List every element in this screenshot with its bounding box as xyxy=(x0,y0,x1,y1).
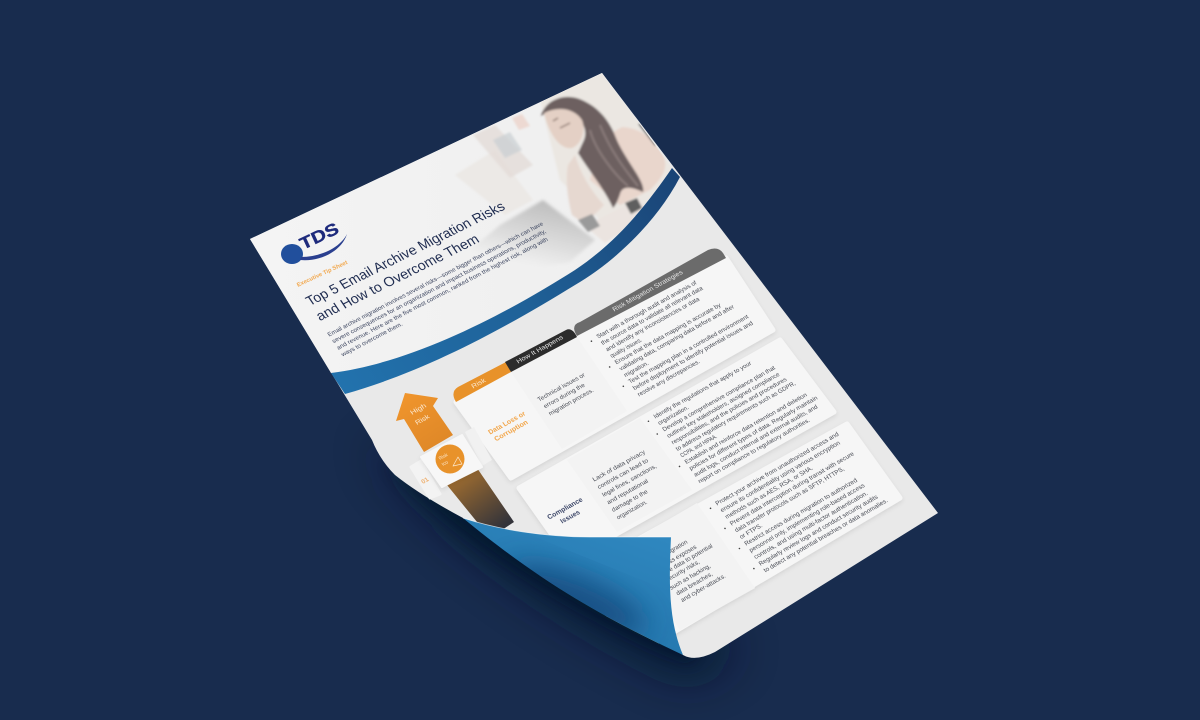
strategies: row 1: Ensure that the data mapping is accurate by xyxy=(613,302,723,366)
how it happens: row 2: organization. xyxy=(615,499,649,521)
how it happens: row 3: such as hacking, xyxy=(669,563,712,592)
header tab: Risk xyxy=(453,362,511,402)
hero backdrop xyxy=(250,73,610,373)
how it happens: row 2: damage to the xyxy=(611,488,650,514)
strategies: row 1: migration. xyxy=(623,360,650,379)
how it happens: row 2: legal fines, sanctions, xyxy=(601,463,658,499)
how it happens: row 3: data breaches, xyxy=(675,571,714,597)
strategies: row 2: to address regulatory requirements such as GDPR, xyxy=(675,380,797,453)
icon: risk badge xyxy=(436,444,464,474)
risk name: Data Loss or Corruption: Corruption xyxy=(493,419,530,443)
page shadow under the curl xyxy=(370,440,740,680)
strategies: row 1: quality issues. xyxy=(609,337,644,360)
risk name: Compliance Issues: Issues xyxy=(559,509,582,525)
strategies: row 3 xyxy=(707,430,890,578)
icon: risk badge: Ico xyxy=(441,459,450,468)
page curl: blue flap xyxy=(463,518,683,655)
how it happens: row 1: errors during the xyxy=(542,382,587,410)
how it happens: row 1: Technical issues or xyxy=(536,372,587,403)
icon: risk badge: Risk xyxy=(438,452,450,462)
strategies: row 3: controls, and using multi-factor authentication. xyxy=(753,490,870,561)
how it happens: row 2: Lack of data privacy xyxy=(591,448,648,483)
header tab: Risk: Risk xyxy=(470,377,488,390)
page sheet xyxy=(250,73,938,658)
how it happens: row 3: security risks, xyxy=(665,559,701,583)
row 1 middle column xyxy=(511,337,627,449)
strategies: row 3: Restrict access during migration to authorized xyxy=(743,477,859,547)
photo: woman at laptop xyxy=(455,73,680,243)
strategies: row 2: audit logs, conduct internal and external audits, and xyxy=(692,404,819,479)
strategies: row 3: methods such as AES, RSA, or SHA. xyxy=(724,465,815,521)
strategies: row 3: to detect any potential breaches or data anomalies. xyxy=(762,497,890,574)
strategies: row 1: resolve any discrepancies. xyxy=(636,358,702,398)
header tab: How It Happens: How It Happens xyxy=(515,334,565,365)
strategies: row 3: Prevent data interception during transit with secure xyxy=(729,450,856,527)
number tab: 01 xyxy=(411,461,440,498)
bar below the badge xyxy=(447,468,514,538)
logo swoosh xyxy=(300,234,347,260)
intro paragraph: ways to overcome them. xyxy=(339,321,404,359)
strategies: row 2: policies for different types of data. Regularly maintain xyxy=(688,395,819,472)
strategies: row 1: Test the mapping plan in a controlled environment xyxy=(627,314,750,385)
logo globe xyxy=(281,244,303,264)
row 3 base xyxy=(606,422,902,644)
flap top highlight xyxy=(463,518,671,537)
strategies: row 2: Identify the regulations that apply to your xyxy=(652,360,753,420)
number tab: 01: 01 xyxy=(420,476,431,486)
strategies: row 3: data transfer protocols such as SFTP, HTTPS, xyxy=(734,466,846,534)
curved header band xyxy=(331,168,680,394)
row 1 base xyxy=(456,258,773,478)
how it happens: row 1: migration process. xyxy=(547,387,595,417)
risk name: Data Loss or Corruption: Data Loss or xyxy=(487,411,527,436)
logo wordmark: TDS xyxy=(297,219,342,254)
strategies: row 3: or FTPS. xyxy=(738,522,764,541)
risk name: Compliance Issues: Compliance xyxy=(546,497,585,521)
how it happens: row 3: Data migration xyxy=(651,538,690,565)
laptop xyxy=(482,199,594,261)
how it happens: row 3: and cyber-attacks. xyxy=(680,573,727,604)
strategies: row 1: validating data, comparing data before and after xyxy=(618,304,736,372)
strategies: row 2: responsibilities, and the policies and procedures xyxy=(670,376,788,446)
intro paragraph: severe consequences for an organization and impact business operations, productivity, xyxy=(331,228,548,345)
strategies: row 2: Establish and reinforce data retention and deletion xyxy=(683,392,809,466)
title: Top 5 Email Archive Migration Risks xyxy=(303,198,508,309)
strategies: row 2 xyxy=(646,343,828,489)
arrow: High Risk: High xyxy=(409,403,428,417)
badge plate xyxy=(421,435,482,487)
connector tab xyxy=(465,427,492,466)
intro paragraph: Email archive migration involves several risks—some bigger than others—which can have xyxy=(326,220,545,338)
how it happens: row 2 xyxy=(591,448,673,521)
row 3 middle column xyxy=(681,503,755,606)
document page xyxy=(240,60,938,658)
strategies: row 2: outlines key stakeholders, assigned compliance xyxy=(666,371,782,440)
strategies: row 1: and identify any inconsistencies or data xyxy=(604,296,702,353)
table row 1 card xyxy=(456,258,773,478)
table row 2 card xyxy=(519,340,834,560)
strategies: row 1: before deployment to identify potential issues and xyxy=(632,320,755,392)
risk name: Compliance Issues xyxy=(546,497,590,529)
strategies: row 1: Start with a thorough audit and analysis of xyxy=(595,280,698,340)
header tab: How It Happens xyxy=(505,329,577,372)
logo xyxy=(281,219,347,264)
arrow: High Risk xyxy=(396,393,453,452)
strategies: row 3: Protect your archive from unauthorized access and xyxy=(714,431,841,507)
how it happens: row 1 xyxy=(536,372,597,418)
header tab: Risk Mitigation Strategies: Risk Mitigation Strategies xyxy=(611,269,684,313)
risk scale column xyxy=(396,393,514,538)
risk name: Data Loss or Corruption xyxy=(487,411,533,443)
strategies: row 3: personnel only, implementing role-based access xyxy=(748,482,866,554)
eyebrow: Executive Tip Sheet: Executive Tip Sheet xyxy=(296,260,349,289)
strategies: row 3: ensure its confidentiality using various encryption xyxy=(719,439,842,514)
strategies: row 3: Regularly review logs and conduct security audits xyxy=(758,494,879,567)
strategies: row 1 xyxy=(588,268,760,402)
how it happens: row 3: process exposes xyxy=(654,544,698,573)
title: and How to Overcome Them xyxy=(313,231,482,324)
header tab: Risk Mitigation Strategies xyxy=(574,249,726,336)
how it happens: row 2: controls can lead to xyxy=(596,457,650,491)
how it happens: row 3: sensitive data to potential xyxy=(650,543,714,584)
strategies: row 2: Develop a comprehensive compliance plan that xyxy=(661,365,777,433)
row 2 middle column xyxy=(567,418,692,532)
strategies: row 2: organization. xyxy=(657,404,691,427)
row 2 base xyxy=(519,340,834,560)
strategies: row 2: CCPA, and HIPAA. xyxy=(679,433,719,459)
arrow: High Risk: Risk xyxy=(414,413,432,427)
strategies: row 2: report on compliance to regulatory authorities. xyxy=(697,417,812,485)
how it happens: row 3 xyxy=(650,538,727,604)
intro paragraph: and revenue. Here are the five most common, ranked from the highest risk, along with xyxy=(335,236,550,352)
strategies: row 1: the source data to validate all relevant data xyxy=(600,285,705,347)
table cards xyxy=(456,258,900,655)
how it happens: row 2: and reputational xyxy=(606,478,650,506)
panel: header photo area xyxy=(250,73,667,373)
flap shading xyxy=(512,551,652,637)
table row 3 card xyxy=(606,422,902,644)
